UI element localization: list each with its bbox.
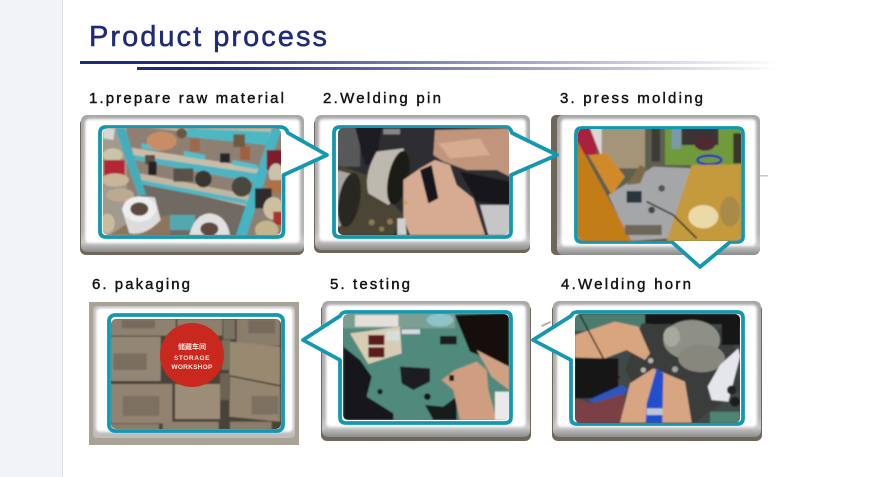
storage workshop badge: WORKSHOP: [171, 364, 213, 371]
photo: cartons in storage: [108, 317, 285, 432]
title underline: [80, 61, 780, 70]
photo: testing earphones: [342, 312, 512, 423]
step 2 label: 2.Welding pin: [323, 90, 441, 107]
photo: welding horn hands: [573, 313, 742, 424]
step 5 label: 5. testing: [330, 276, 410, 293]
panel: step 4 welding horn: [533, 301, 762, 441]
storage workshop badge: 储藏车间: [178, 342, 206, 351]
photo: hands welding pins: [338, 128, 509, 235]
panel: step 3 press molding: [551, 115, 768, 267]
arrow callout frame: [576, 128, 743, 267]
panel: step 6 pakaging: [89, 302, 299, 445]
callout frame: [109, 315, 283, 431]
left sidebar: [0, 0, 63, 477]
arrow callout frame: [533, 312, 743, 424]
arrow callout frame: [334, 127, 557, 237]
panel: step 2 welding pin: [314, 115, 557, 253]
storage workshop badge: [160, 323, 224, 387]
arrow callout frame: [100, 127, 327, 237]
photo: raw material rack: [100, 125, 283, 239]
panel: step 1 prepare raw material: [80, 115, 327, 255]
arrow callout frame: [303, 312, 511, 423]
panel: step 5 testing: [303, 301, 531, 441]
step 1 label: 1.prepare raw material: [89, 90, 284, 107]
title: Product process: [89, 21, 327, 53]
storage workshop badge: STORAGE: [174, 355, 210, 362]
step 3 label: 3. press molding: [560, 90, 703, 107]
step 4 label: 4.Welding horn: [561, 276, 691, 293]
photo: press machine: [578, 129, 741, 241]
step 6 label: 6. pakaging: [92, 276, 190, 293]
